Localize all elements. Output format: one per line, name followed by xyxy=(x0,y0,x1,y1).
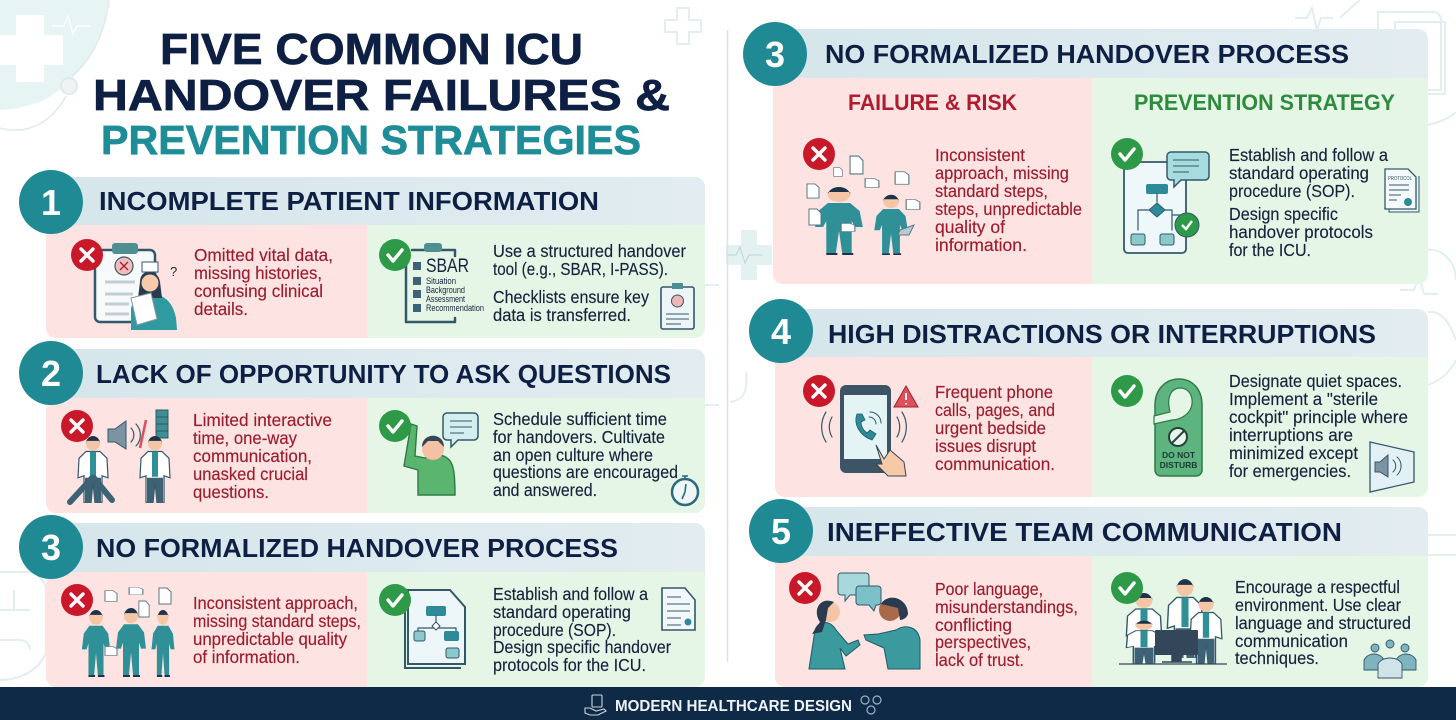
failure text: communication, xyxy=(193,446,312,466)
failure text: urgent bedside xyxy=(935,418,1046,438)
icon: SBAR clipboard: Background xyxy=(426,285,465,295)
panel 5 background xyxy=(775,556,1428,687)
prevention text: protocols for the ICU. xyxy=(493,655,646,675)
icon: person raising hand xyxy=(404,413,478,495)
icon: small group xyxy=(1364,640,1416,678)
panel 1 heading: INCOMPLETE PATIENT INFORMATION xyxy=(99,186,599,216)
failure text: confusing clinical xyxy=(194,281,323,301)
icon: red cross xyxy=(789,572,821,604)
icon: three nurses with flying papers xyxy=(82,587,174,677)
failure text: misunderstandings, xyxy=(935,597,1078,617)
icon: do not disturb door hanger: DO NOT xyxy=(1162,450,1196,460)
icon: checklist xyxy=(661,283,694,329)
failure text: standard steps, xyxy=(935,181,1048,201)
number badge 1 xyxy=(19,170,83,234)
right panel 3 background xyxy=(773,78,1428,284)
prevention text: Designate quiet spaces. xyxy=(1229,371,1402,391)
failure text: missing histories, xyxy=(194,263,322,283)
prevention text: techniques. xyxy=(1235,648,1319,668)
prevention text xyxy=(1235,577,1411,668)
icon: one-way communication xyxy=(70,410,170,503)
icon: nurse with clipboard: ? xyxy=(170,264,177,279)
prevention text: Checklists ensure key xyxy=(493,287,649,307)
number badge 2: 2 xyxy=(41,353,61,394)
icon: certificate: PROTOCOL xyxy=(1388,176,1412,182)
icon: red cross xyxy=(71,239,103,271)
number badge 3 xyxy=(19,515,83,579)
number badge 5 xyxy=(749,499,813,563)
icon: green check xyxy=(1111,375,1143,407)
panel: 5 ineffective team communication xyxy=(749,499,1428,687)
icon: SBAR clipboard: SBAR xyxy=(426,256,469,277)
panel 4 heading xyxy=(795,309,1428,357)
number badge 4: 4 xyxy=(771,311,791,352)
icon: green check xyxy=(379,410,411,442)
title: FIVE COMMON ICU xyxy=(160,25,583,74)
failure text: of information. xyxy=(193,647,300,667)
prevention text: an open culture where xyxy=(493,445,653,465)
prevention text: Design specific handover xyxy=(493,637,671,657)
icon: nurse with clipboard xyxy=(95,243,177,330)
icon: certificate xyxy=(1385,169,1419,212)
panel: 2 lack of opportunity to ask questions xyxy=(19,341,705,513)
failure text: Inconsistent approach, xyxy=(193,593,358,613)
failure text: information. xyxy=(935,235,1027,255)
prevention text: procedure (SOP). xyxy=(493,620,616,640)
icon: red cross xyxy=(61,584,93,616)
title xyxy=(93,25,670,163)
prevention text: Establish and follow a xyxy=(493,584,648,604)
failure text: quality of xyxy=(935,217,1005,237)
number badge 2 xyxy=(19,341,83,405)
prevention text: Encourage a respectful xyxy=(1235,577,1400,597)
icon: green check xyxy=(379,239,411,271)
prevention text: tool (e.g., SBAR, I-PASS). xyxy=(493,259,668,279)
failure text xyxy=(193,593,361,667)
failure text: questions. xyxy=(193,482,269,502)
failure text: Inconsistent xyxy=(935,145,1025,165)
failure text: conflicting xyxy=(935,615,1012,635)
icon: flowchart with speech bubble xyxy=(1124,152,1209,253)
failure text: Omitted vital data, xyxy=(194,245,333,265)
failure text: Limited interactive xyxy=(193,410,332,430)
failure text xyxy=(935,382,1055,474)
icon: document xyxy=(662,588,695,630)
right panel 3 heading xyxy=(790,29,1428,78)
title: HANDOVER FAILURES & xyxy=(93,71,670,120)
failure text: unpredictable quality xyxy=(193,629,347,649)
panel 3 heading xyxy=(60,523,705,572)
panel 1 heading xyxy=(60,177,705,225)
failure text: Frequent phone xyxy=(935,382,1053,402)
panel 2 heading xyxy=(60,349,705,398)
failure text: time, one-way xyxy=(193,428,297,448)
panel 4 heading: HIGH DISTRACTIONS OR INTERRUPTIONS xyxy=(828,319,1376,349)
prevention text: data is transferred. xyxy=(493,305,631,325)
column heading: failure and risk: FAILURE & RISK xyxy=(848,90,1017,115)
panel 2 heading: LACK OF OPPORTUNITY TO ASK QUESTIONS xyxy=(96,359,671,389)
icon: medical team at monitor xyxy=(1119,579,1227,664)
failure text: missing standard steps, xyxy=(193,611,361,631)
prevention text: interruptions are xyxy=(1229,425,1353,445)
number badge 4 xyxy=(749,299,813,363)
icon: red cross xyxy=(61,410,93,442)
failure text: calls, pages, and xyxy=(935,400,1055,420)
failure text: steps, unpredictable xyxy=(935,199,1082,219)
icon: stopwatch xyxy=(672,476,698,505)
icon: red cross xyxy=(803,375,835,407)
prevention text: Design specific xyxy=(1229,204,1338,224)
icon: hand holding clipboard xyxy=(585,695,606,715)
prevention text: Use a structured handover xyxy=(493,241,686,261)
prevention text: for handovers. Cultivate xyxy=(493,427,665,447)
prevention text xyxy=(493,241,686,325)
panel 1 background xyxy=(46,225,705,338)
failure text: Poor language, xyxy=(935,579,1043,599)
icon: SBAR clipboard: Assessment xyxy=(426,294,465,304)
failure text xyxy=(193,410,332,502)
icon: SBAR clipboard xyxy=(406,243,484,322)
prevention text xyxy=(1229,371,1408,481)
icon: two people arguing xyxy=(809,573,920,669)
prevention text: cockpit" principle where xyxy=(1229,407,1408,427)
prevention text: for the ICU. xyxy=(1229,240,1311,260)
prevention text: environment. Use clear xyxy=(1235,595,1401,615)
failure text: details. xyxy=(194,299,248,319)
panel 3 heading: NO FORMALIZED HANDOVER PROCESS xyxy=(96,533,618,563)
failure text xyxy=(194,245,333,319)
footer text: MODERN HEALTHCARE DESIGN xyxy=(615,698,852,715)
panel: 3 no formalized handover process (right) xyxy=(743,22,1428,284)
panel 3 background xyxy=(46,572,705,687)
footer bar xyxy=(0,687,1456,720)
right panel 3 heading: NO FORMALIZED HANDOVER PROCESS xyxy=(825,39,1349,69)
failure text: perspectives, xyxy=(935,632,1031,652)
icon: speaker panel xyxy=(1370,442,1414,492)
prevention text: handover protocols xyxy=(1229,222,1373,242)
panel: 4 high distractions or interruptions xyxy=(749,299,1428,497)
panel: 1 incomplete patient information xyxy=(19,170,705,338)
column heading: prevention strategy: PREVENTION STRATEGY xyxy=(1134,90,1395,115)
icon: green check xyxy=(379,584,411,616)
icon: green check xyxy=(1111,138,1143,170)
panel 2 background xyxy=(46,398,705,513)
panel 4 background xyxy=(775,357,1428,497)
icon: red cross xyxy=(803,138,835,170)
icon: do not disturb door hanger: DISTURB xyxy=(1160,460,1197,470)
number badge 3: 3 xyxy=(41,527,61,568)
number badge 3: 3 xyxy=(765,34,785,75)
prevention text: and answered. xyxy=(493,480,597,500)
failure text xyxy=(935,145,1082,255)
prevention text: Establish and follow a xyxy=(1229,145,1388,165)
prevention text: Schedule sufficient time xyxy=(493,409,667,429)
icon: SBAR clipboard: Situation xyxy=(426,276,456,286)
prevention text: for emergencies. xyxy=(1229,461,1351,481)
icon: do not disturb door hanger xyxy=(1154,379,1202,476)
panel: 3 no formalized handover process xyxy=(19,515,705,687)
panel 5 heading: INEFFECTIVE TEAM COMMUNICATION xyxy=(827,517,1342,547)
icon: three gears xyxy=(861,696,881,714)
prevention text: language and structured xyxy=(1235,613,1411,633)
prevention text xyxy=(493,409,678,500)
icon: green check xyxy=(1111,572,1143,604)
failure text: communication. xyxy=(935,454,1055,474)
number badge 5: 5 xyxy=(771,511,791,552)
prevention text: Implement a "sterile xyxy=(1229,389,1378,409)
failure text: approach, missing xyxy=(935,163,1069,183)
failure text xyxy=(935,579,1078,670)
prevention text xyxy=(493,584,671,675)
prevention text: questions are encouraged xyxy=(493,462,678,482)
prevention text: communication xyxy=(1235,631,1348,651)
failure text: lack of trust. xyxy=(935,650,1024,670)
icon: ringing phone with warning xyxy=(822,385,918,476)
prevention text xyxy=(1229,145,1388,260)
prevention text: standard operating xyxy=(493,602,631,622)
failure text: unasked crucial xyxy=(193,464,308,484)
icon: two staff with flying papers xyxy=(807,156,920,255)
failure text: issues disrupt xyxy=(935,436,1036,456)
prevention text: procedure (SOP). xyxy=(1229,181,1355,201)
icon: SBAR clipboard: Recommendation xyxy=(426,303,484,313)
prevention text: standard operating xyxy=(1229,163,1369,183)
prevention text: minimized except xyxy=(1229,443,1358,463)
icon: SOP flowchart document xyxy=(405,590,465,668)
divider xyxy=(726,30,728,662)
number badge 1: 1 xyxy=(41,182,61,223)
title: PREVENTION STRATEGIES xyxy=(101,117,641,163)
panel 5 heading xyxy=(795,507,1428,556)
number badge 3 xyxy=(743,22,807,86)
